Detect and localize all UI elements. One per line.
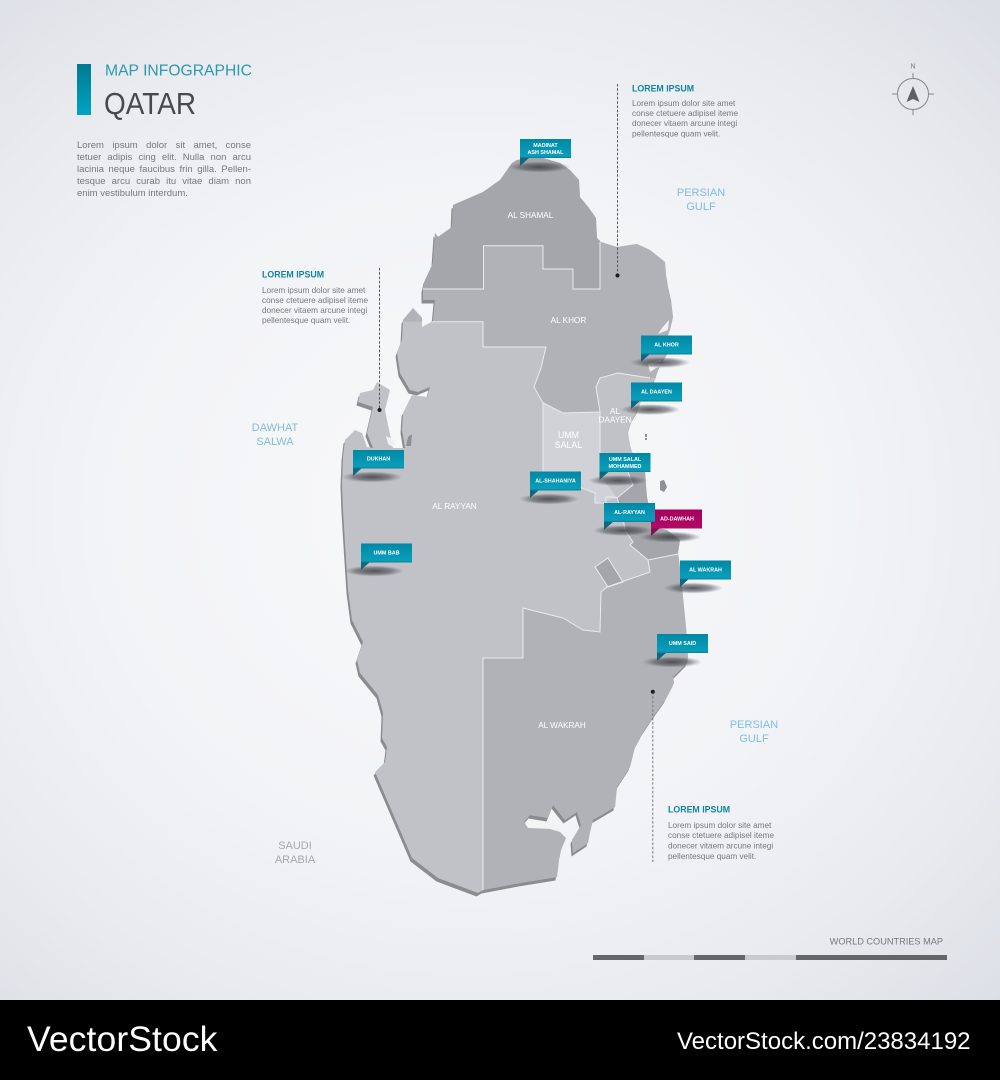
callout: west: conse ctetuere adipisel iteme bbox=[262, 296, 368, 305]
marker: Umm Bab: UMM BAB bbox=[373, 550, 400, 556]
callout: north: Lorem ipsum dolor site amet bbox=[632, 99, 736, 108]
marker: Ad-Dawhah: AD-DAWHAH bbox=[660, 516, 694, 522]
heading: map infographic: MAP INFOGRAPHIC bbox=[105, 62, 252, 80]
callout: north bbox=[616, 84, 738, 278]
land label: Saudi Arabia: SAUDI bbox=[278, 840, 312, 852]
marker: Al Wakrah: AL WAKRAH bbox=[689, 568, 722, 574]
marker: Madinat Ash Shamal bbox=[508, 139, 571, 172]
intro paragraph: Lorem ipsum dolor sit amet, conse bbox=[77, 140, 251, 151]
region: Al Khor bbox=[403, 242, 673, 412]
marker: Umm Salal Mohammed: MOHAMMED bbox=[609, 464, 642, 470]
marker: Al-Shahaniya bbox=[519, 472, 581, 504]
marker: Dukhan bbox=[342, 450, 404, 482]
compass icon: N bbox=[910, 64, 916, 70]
marker: Al Khor: AL KHOR bbox=[654, 342, 679, 348]
region: Al Rayyan bbox=[342, 158, 688, 893]
marker: Al-Shahaniya: AL-SHAHANIYA bbox=[535, 478, 576, 484]
marker: Umm Salal Mohammed: UMM SALAL bbox=[609, 457, 641, 463]
marker: Umm Bab bbox=[344, 544, 412, 576]
sea label: Persian Gulf south: PERSIAN bbox=[730, 719, 778, 731]
callout: north: conse ctetuere adipisel iteme bbox=[632, 109, 738, 118]
marker: Madinat Ash Shamal: MADINAT bbox=[533, 143, 558, 149]
region borders bbox=[420, 242, 678, 892]
region: Al Daayen bbox=[628, 378, 656, 453]
intro paragraph: enim vestibulum interdum. bbox=[77, 188, 188, 199]
region: enclave bbox=[596, 558, 622, 586]
compass icon bbox=[892, 64, 934, 115]
callout: south: Lorem ipsum dolor site amet bbox=[668, 821, 772, 830]
callout: south: conse ctetuere adipisel iteme bbox=[668, 831, 774, 840]
callout: south bbox=[651, 690, 774, 862]
region: Umm Salal bbox=[543, 402, 617, 503]
callout: south: donecer vitaem arcune integi bbox=[668, 842, 773, 850]
marker: Al-Rayyan: AL-RAYYAN bbox=[614, 510, 645, 516]
watermark footer bar bbox=[0, 1000, 1000, 1080]
sea label: Dawhat Salwa: DAWHAT bbox=[252, 422, 298, 434]
region labels: AL RAYYAN bbox=[432, 502, 477, 511]
region labels: AL WAKRAH bbox=[538, 721, 586, 730]
callout: west bbox=[262, 268, 382, 412]
region labels bbox=[432, 211, 632, 730]
region labels: AL SHAMAL bbox=[508, 211, 554, 220]
marker: Umm Said: UMM SAID bbox=[669, 641, 696, 647]
sea label: Persian Gulf south: GULF bbox=[739, 733, 769, 745]
region labels: UMM bbox=[558, 430, 579, 440]
marker: Dukhan: DUKHAN bbox=[367, 456, 390, 462]
callout: west: donecer vitaem arcune integi bbox=[262, 306, 367, 315]
marker: Al Wakrah bbox=[663, 560, 731, 594]
land label: Saudi Arabia: ARABIA bbox=[275, 854, 316, 866]
region: Al Shamal bbox=[424, 158, 600, 288]
callout: west: Lorem ipsum dolor site amet bbox=[262, 286, 366, 295]
map of Qatar with regions bbox=[340, 158, 688, 896]
callout: north: pellentesque quam velit. bbox=[632, 130, 720, 138]
region: Ad-Dawhah bbox=[618, 472, 680, 560]
sea label: Dawhat Salwa: SALWA bbox=[256, 436, 294, 448]
marker: Al-Rayyan bbox=[593, 503, 655, 536]
watermark url text: VectorStock.com/23834192 bbox=[677, 1028, 971, 1055]
footer caption: WORLD COUNTRIES MAP bbox=[830, 936, 943, 946]
heading: country name: QATAR bbox=[104, 86, 196, 121]
callout: north: donecer vitaem arcune integi bbox=[632, 119, 737, 128]
map extrusion shadow bbox=[340, 208, 686, 896]
intro paragraph: lacinia neque faucibus frin gilla. Pellen- bbox=[77, 164, 251, 175]
watermark logo text: VectorStock bbox=[27, 1019, 218, 1059]
callout: north: LOREM IPSUM bbox=[632, 84, 694, 94]
region: Al Wakrah bbox=[484, 554, 688, 890]
callout: south: LOREM IPSUM bbox=[668, 804, 730, 814]
region labels: SALAL bbox=[555, 440, 582, 450]
marker: Ad-Dawhah bbox=[639, 510, 702, 542]
sea label: Persian Gulf north: PERSIAN bbox=[677, 187, 725, 199]
callout: west: LOREM IPSUM bbox=[262, 270, 324, 280]
intro paragraph: tesque arcu curab itu vitae diam non bbox=[77, 176, 251, 187]
marker: Umm Said bbox=[642, 634, 708, 668]
callout: south: pellentesque quam velit. bbox=[668, 852, 756, 861]
intro paragraph bbox=[77, 140, 251, 199]
marker: Al Daayen bbox=[620, 382, 682, 415]
heading accent bar bbox=[77, 64, 91, 115]
marker: Madinat Ash Shamal: ASH SHAMAL bbox=[528, 150, 564, 156]
coastal inlets bbox=[386, 320, 669, 447]
sea label: Persian Gulf north: GULF bbox=[686, 201, 716, 213]
marker: Umm Salal Mohammed bbox=[588, 453, 650, 486]
region labels: AL KHOR bbox=[551, 316, 586, 325]
callout: west: pellentesque quam velit. bbox=[262, 316, 350, 325]
region labels: AL bbox=[610, 407, 620, 416]
marker: Al Daayen: AL DAAYEN bbox=[641, 390, 672, 396]
scale bar bbox=[593, 955, 947, 960]
small islands bbox=[406, 434, 667, 492]
region labels: DAAYEN bbox=[598, 416, 632, 424]
intro paragraph: tetuer adipis cing elit. Nulla non arcu bbox=[77, 152, 251, 163]
marker: Al Khor bbox=[630, 336, 692, 368]
regions bbox=[342, 158, 688, 893]
